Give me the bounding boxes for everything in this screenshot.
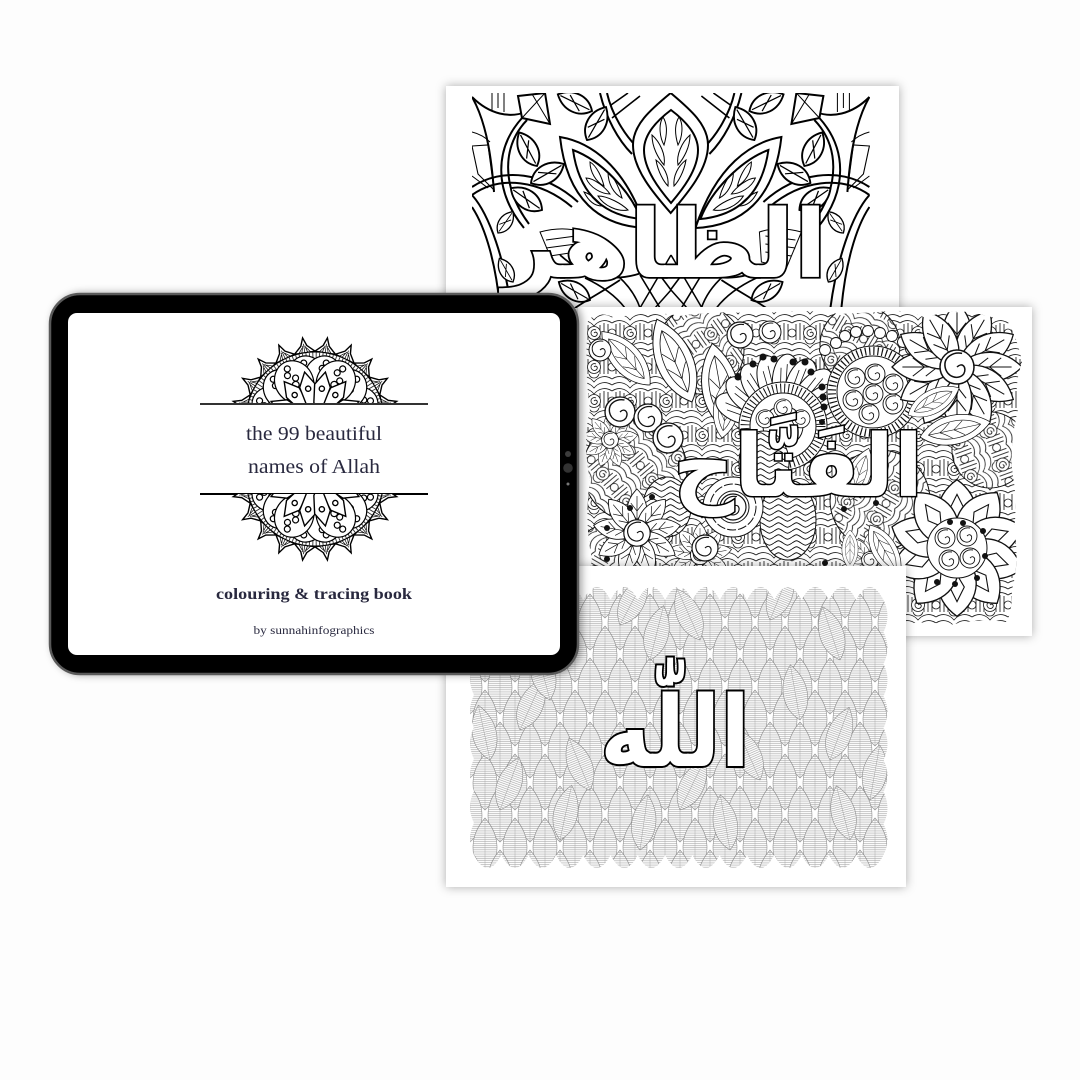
bottom half mandala xyxy=(231,408,399,562)
wave ovals xyxy=(643,477,691,537)
lower left flower xyxy=(593,488,681,566)
cover title xyxy=(246,423,382,478)
tablet body xyxy=(50,294,578,674)
arabic name: Allah: اللّٰه xyxy=(600,657,750,790)
mandala line art xyxy=(472,86,869,308)
right flowers xyxy=(891,312,1021,424)
panel: colouring page Al-Fattah xyxy=(561,289,1039,636)
black dots xyxy=(604,354,988,587)
top rule xyxy=(200,403,428,405)
panel: colouring page Allah xyxy=(446,564,906,887)
leaf pattern art xyxy=(470,587,888,868)
bead chain xyxy=(820,326,916,356)
panel: colouring page Az-Zahir xyxy=(446,86,899,326)
arabic name: Al-Fattah: الفَتَّاح xyxy=(673,413,923,517)
rose xyxy=(703,477,763,537)
arabic name: Az-Zahir: الظاهر xyxy=(499,191,827,300)
tablet screen xyxy=(68,313,560,655)
top half mandala xyxy=(231,336,399,490)
swirl circle xyxy=(827,346,919,438)
flower with black dots xyxy=(715,354,832,470)
cover title: the 99 beautiful xyxy=(246,423,382,445)
bottom rule xyxy=(200,493,428,495)
cover title: names of Allah xyxy=(248,456,380,478)
tablet cameras xyxy=(563,451,573,486)
byline: by sunnahinfographics xyxy=(254,625,375,637)
floral line art xyxy=(586,310,1022,624)
tablet device xyxy=(50,294,578,674)
subtitle: colouring & tracing book xyxy=(216,586,412,603)
